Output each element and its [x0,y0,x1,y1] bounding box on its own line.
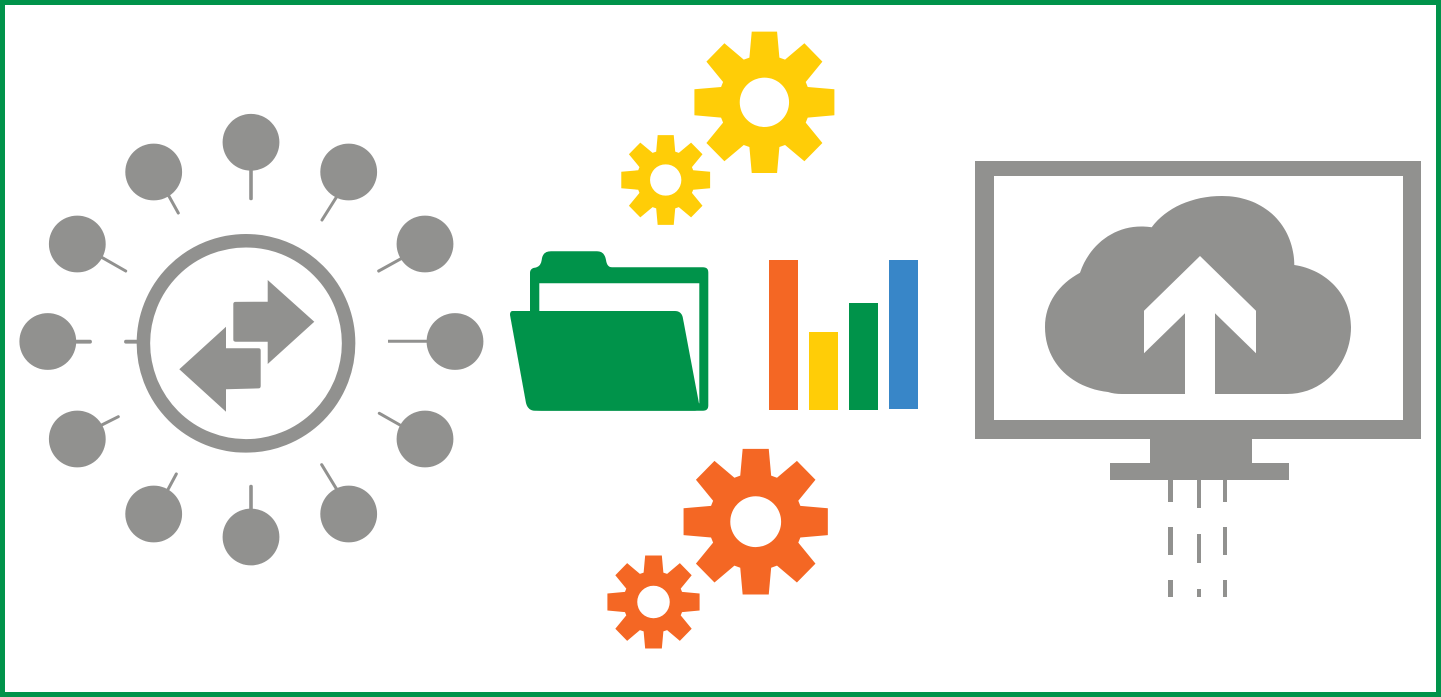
icon: cloud [1045,196,1351,394]
monitor stand [1110,439,1289,480]
exchange arrow left [179,327,261,412]
large yellow gear [694,32,834,173]
monitor with cloud upload [975,161,1421,597]
large orange gear [684,449,828,595]
yellow gears [621,32,834,225]
monitor screen frame [975,161,1421,439]
connector lines [75,168,427,510]
small yellow gear [621,135,710,225]
icon: green folder [510,251,708,411]
exchange arrow right [233,280,314,364]
network hub diagram [19,114,483,565]
hub ring [143,241,349,446]
orange gears [607,449,828,649]
satellite nodes [19,114,483,565]
icon: upload arrow [1144,256,1256,394]
small orange gear [607,555,700,649]
dashed data lines [1168,480,1227,597]
bar chart [769,260,918,410]
